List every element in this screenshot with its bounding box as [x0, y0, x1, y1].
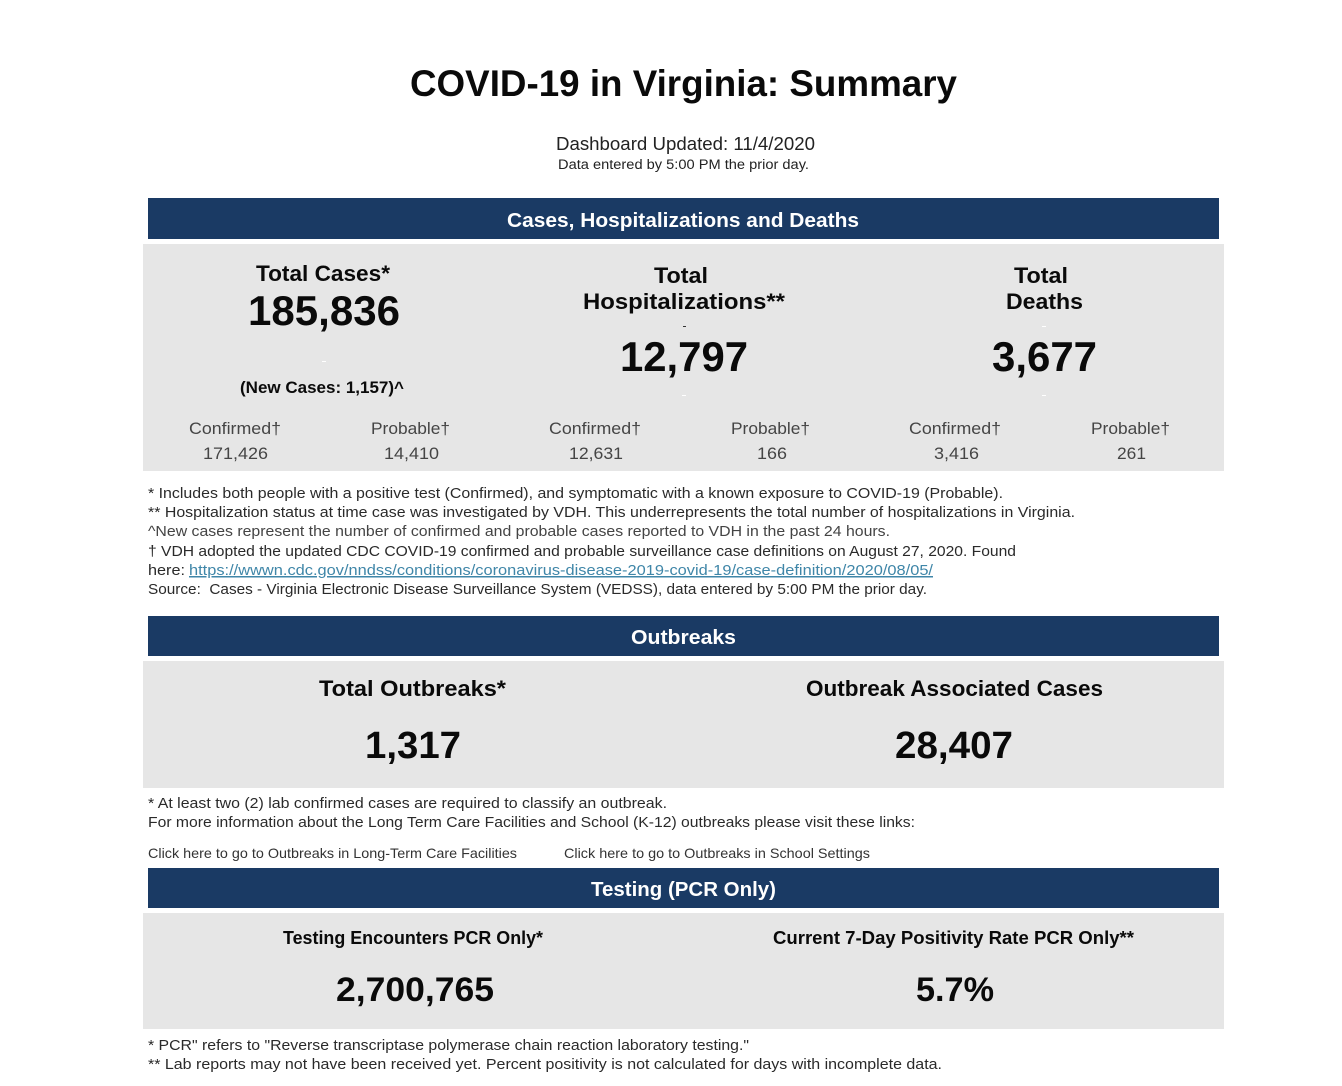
section header: outbreaks — [148, 616, 1219, 656]
breakdown: cases confirmed — [189, 419, 281, 463]
metric: testing encounters: Testing Encounters PCR Only* — [283, 927, 544, 948]
panel: outbreaks — [143, 661, 1224, 788]
footnotes: cases section: ^New cases represent the number of confirmed and probable cases reported to VDH in the past 24 hours. — [148, 523, 890, 540]
footnotes: testing section: ** Lab reports may not have been received yet. Percent positivity is not calculated for days with incomplete data. — [148, 1056, 942, 1073]
breakdown: hospitalizations probable — [731, 419, 810, 463]
metric: total cases — [240, 261, 404, 397]
breakdown: cases probable: Probable† — [371, 419, 450, 438]
title: COVID-19 in Virginia: Summary — [410, 63, 957, 104]
section header: cases, hospitalizations and deaths — [148, 198, 1219, 239]
breakdown: deaths confirmed: 3,416 — [934, 444, 979, 463]
metric: positivity rate: Current 7-Day Positivity Rate PCR Only** — [773, 927, 1135, 948]
breakdown: cases probable: 14,410 — [384, 444, 439, 463]
metric: total outbreaks — [319, 676, 506, 767]
breakdown: deaths confirmed: Confirmed† — [909, 419, 1001, 438]
footnotes: cases section: https://wwwn.cdc.gov/nndss/conditions/coronavirus-disease-2019-covid-19/case-definition/2020/08/05/ — [189, 562, 934, 579]
breakdown: deaths probable: 261 — [1117, 444, 1146, 463]
metric: positivity rate: 5.7% — [916, 971, 994, 1009]
metric: outbreak associated cases: 28,407 — [895, 725, 1013, 767]
footnotes: testing section — [148, 1037, 942, 1073]
section header: cases, hospitalizations and deaths: Cases, Hospitalizations and Deaths — [507, 210, 859, 232]
breakdown: hospitalizations probable: 166 — [757, 444, 787, 463]
footnotes: cases section: ** Hospitalization status at time case was investigated by VDH. This underrepresents the total number of hospitalizations in Virginia. — [148, 504, 1075, 521]
metric: testing encounters — [283, 927, 544, 1009]
breakdown: hospitalizations confirmed: Confirmed† — [549, 419, 641, 438]
metric: total outbreaks: 1,317 — [365, 725, 461, 767]
breakdown: hospitalizations confirmed — [549, 419, 641, 463]
metric: total deaths — [992, 263, 1097, 396]
breakdown: cases confirmed: Confirmed† — [189, 419, 281, 438]
footnotes: cases section — [148, 485, 1075, 598]
metric: total deaths: Deaths — [1006, 289, 1083, 314]
breakdown: deaths confirmed — [909, 419, 1001, 463]
footnotes: cases section: Source: Cases - Virginia Electronic Disease Surveillance System (VEDSS), data entered by 5:00 PM the prior day. — [148, 581, 927, 598]
breakdown: hospitalizations probable: Probable† — [731, 419, 810, 438]
metric: total hospitalizations: 12,797 — [620, 333, 748, 380]
metric: total cases: Total Cases* — [256, 261, 390, 286]
breakdown: hospitalizations confirmed: 12,631 — [569, 444, 623, 463]
subtitle: dashboard updated date: Data entered by 5:00 PM the prior day. — [558, 157, 809, 172]
metric: total deaths: 3,677 — [992, 333, 1097, 380]
metric: outbreak associated cases — [806, 676, 1103, 767]
metric: testing encounters: 2,700,765 — [336, 971, 494, 1009]
footnotes: outbreaks section: For more information about the Long Term Care Facilities and School (K-12) outbreaks please visit these links: — [148, 814, 915, 831]
subtitle: dashboard updated date: Dashboard Updated: 11/4/2020 — [556, 134, 815, 154]
panel: testing — [143, 913, 1224, 1029]
footnotes: outbreaks section — [148, 795, 915, 831]
section header: outbreaks: Outbreaks — [631, 627, 736, 649]
breakdown: deaths probable: Probable† — [1091, 419, 1170, 438]
footnotes: outbreaks section: * At least two (2) lab confirmed cases are required to classify an outbreak. — [148, 795, 667, 812]
panel: cases, hospitalizations and deaths — [143, 244, 1224, 471]
section header: testing — [148, 868, 1219, 908]
breakdown: deaths probable — [1091, 419, 1170, 463]
footnotes: cases section: here: — [148, 562, 185, 579]
metric: total outbreaks: Total Outbreaks* — [319, 676, 506, 701]
footnotes: testing section: * PCR" refers to "Reverse transcriptase polymerase chain reaction laboratory testing." — [148, 1037, 749, 1054]
metric: total hospitalizations — [583, 263, 785, 396]
metric: total hospitalizations: Total — [654, 263, 708, 288]
breakdown: cases probable — [371, 419, 450, 463]
subtitle: dashboard updated date — [556, 134, 815, 172]
metric: total cases: (New Cases: 1,157)^ — [240, 379, 404, 397]
metric: total deaths: Total — [1014, 263, 1068, 288]
metric: total cases: 185,836 — [248, 287, 400, 334]
footnotes: cases section: † VDH adopted the updated CDC COVID-19 confirmed and probable surveillance case definitions on August 27, 2020. Found — [148, 543, 1016, 560]
breakdown: cases confirmed: 171,426 — [203, 444, 268, 463]
section header: testing: Testing (PCR Only) — [591, 879, 776, 901]
metric: positivity rate — [773, 927, 1135, 1009]
link: outbreaks in school settings: Click here to go to Outbreaks in School Settings — [564, 845, 870, 861]
link: outbreaks in long-term care facilities: Click here to go to Outbreaks in Long-Term Care Facilities — [148, 845, 517, 861]
metric: outbreak associated cases: Outbreak Associated Cases — [806, 676, 1103, 701]
footnotes: cases section: * Includes both people with a positive test (Confirmed), and symptomatic with a known exposure to COVID-19 (Probable). — [148, 485, 1003, 502]
metric: total hospitalizations: Hospitalizations** — [583, 289, 785, 314]
